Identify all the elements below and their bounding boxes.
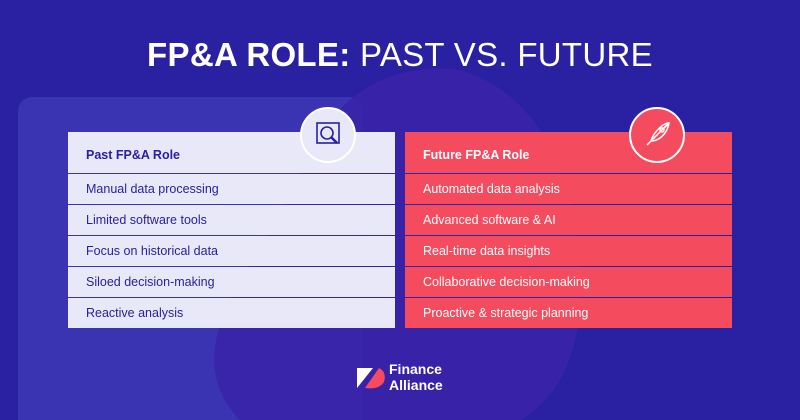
panel: past: Reactive analysis	[86, 306, 183, 320]
header: past	[68, 132, 395, 173]
header: future	[405, 132, 732, 173]
logo: Alliance	[389, 377, 443, 393]
panel: future	[405, 132, 732, 328]
panel: past	[68, 132, 395, 328]
panel: past: Manual data processing	[86, 182, 219, 196]
logo: Finance	[389, 361, 442, 377]
icon: book magnifier	[300, 107, 356, 163]
logo	[357, 361, 443, 393]
panel: past: Limited software tools	[86, 213, 207, 227]
header: past: Past FP&A Role	[86, 148, 180, 162]
panel: future: Advanced software & AI	[423, 213, 556, 227]
icon: rocket	[629, 107, 685, 163]
panel: future: Automated data analysis	[423, 182, 560, 196]
title: FP&A ROLE: PAST VS. FUTURE	[147, 36, 653, 73]
panel: future: Proactive & strategic planning	[423, 306, 588, 320]
panel: future: Collaborative decision-making	[423, 275, 590, 289]
panel: future: Real-time data insights	[423, 244, 550, 258]
panel: past: Focus on historical data	[86, 244, 218, 258]
panel: past: Siloed decision-making	[86, 275, 215, 289]
header: future: Future FP&A Role	[423, 148, 529, 162]
